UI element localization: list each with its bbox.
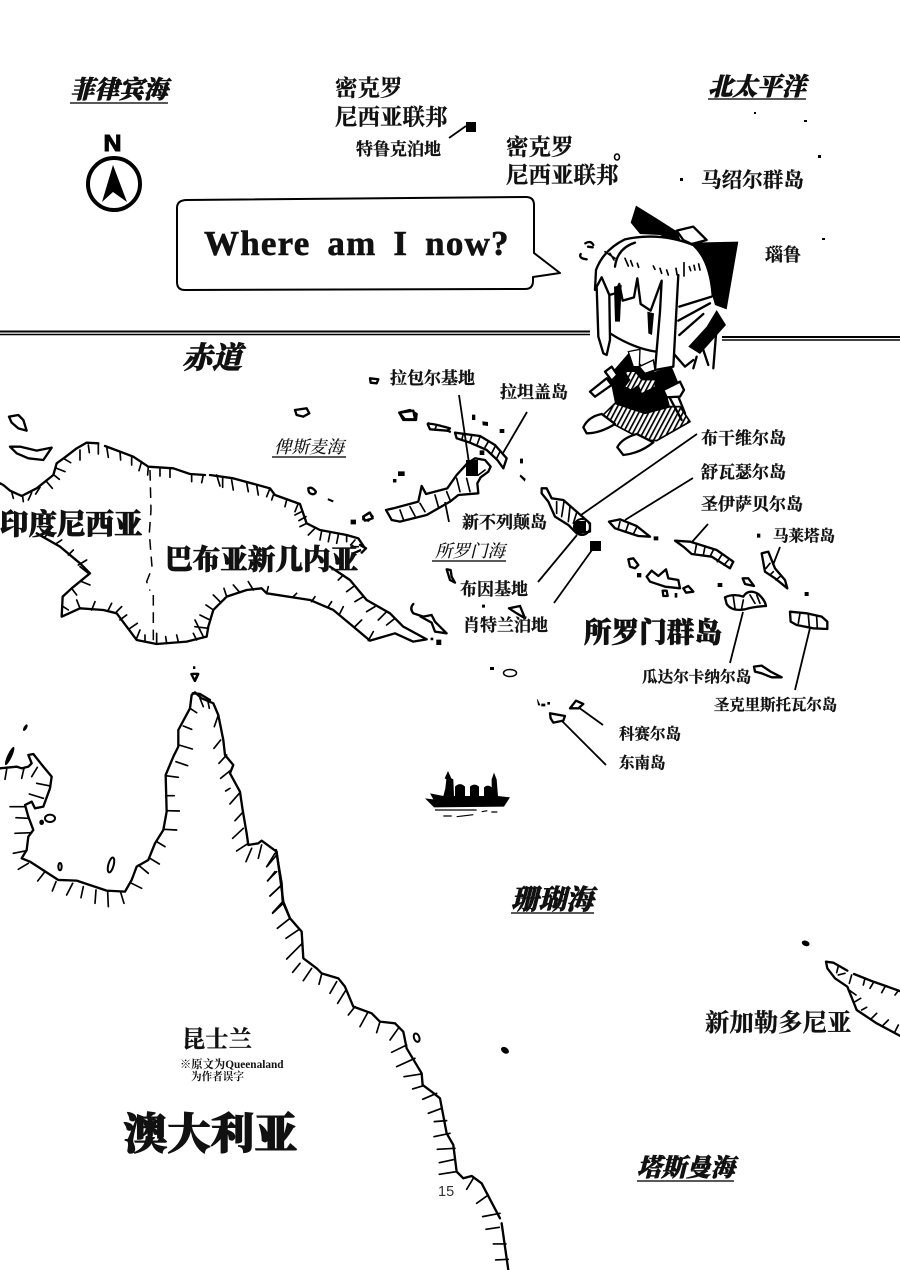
islets near Rabaul (360, 378, 525, 618)
equator line left (0, 332, 590, 334)
label: Micronesia south: 尼西亚联邦 (506, 163, 619, 188)
island: Choiseul (609, 519, 650, 537)
footnote: author typo: 为作者误字 (191, 1070, 244, 1083)
small black islets (193, 472, 441, 669)
island: Malaita (762, 552, 787, 588)
left cuff (605, 367, 617, 381)
water ripples (435, 810, 497, 817)
label: New Britain: 新不列颠岛 (462, 512, 547, 532)
label: Micronesia north (335, 76, 448, 130)
island: Santa Isabel (675, 541, 733, 568)
label: Micronesia south (506, 135, 619, 188)
sea label: Solomon Sea: 所罗门海 (435, 541, 507, 561)
speech text: Where am I now? (204, 224, 510, 263)
ticks: Bougainville (557, 502, 577, 523)
right sleeve (663, 382, 684, 397)
head outline (595, 237, 713, 295)
eyes (614, 285, 654, 335)
head fill (596, 237, 713, 353)
label: Truk anchorage: 特鲁克泊地 (356, 139, 441, 159)
map: New Caledonia (801, 939, 900, 1037)
ticks: New Britain (400, 470, 485, 519)
hair detail marks (605, 252, 700, 276)
label: Bougainville: 布干维尔岛 (701, 428, 786, 448)
speech bubble (177, 197, 560, 290)
island group: north-west islands (9, 408, 450, 700)
islets: Marshall and Nauru (490, 112, 825, 670)
label: Papua New Guinea: 巴布亚新几内亚 (165, 544, 358, 575)
islet (801, 939, 810, 947)
skirt (601, 403, 690, 441)
left arm (590, 378, 612, 397)
map: Queensland coast (268, 850, 510, 1270)
sea label: Philippine Sea: 菲律宾海 (70, 76, 172, 104)
label: Equator: 赤道 (182, 342, 247, 375)
label: Rabaul base: 拉包尔基地 (390, 368, 475, 388)
footnote: author typo (180, 1057, 284, 1083)
right arm (670, 397, 685, 420)
long side hair fill (655, 275, 678, 370)
left bow (631, 206, 683, 246)
label: Marshall Islands: 马绍尔群岛 (701, 168, 804, 192)
coast: New Guinea (0, 443, 427, 644)
label: Micronesia north: 密克罗 (335, 76, 403, 101)
map: Solomon Islands (609, 519, 827, 677)
label: Kossol island: 科赛尔岛 (619, 724, 681, 743)
fringe and long side hair (609, 275, 678, 370)
island: New Ireland (428, 424, 507, 468)
label: Buin base: 布因基地 (460, 580, 528, 599)
sea label: Coral Sea: 珊瑚海 (511, 884, 598, 915)
coast: Queensland (276, 850, 508, 1270)
coast ticks: Cape York (5, 698, 283, 913)
label: Indonesia: 印度尼西亚 (0, 508, 143, 541)
label: Guadalcanal: 瓜达尔卡纳尔岛 (642, 667, 751, 686)
label: South East island: 东南岛 (619, 753, 666, 772)
ticks: Solomon Islands (618, 522, 817, 628)
islets: Coral Sea coast (413, 1033, 510, 1055)
coast ticks: Queensland (268, 855, 508, 1260)
island: Bougainville (542, 488, 590, 533)
hair strands (615, 243, 712, 335)
sea label: North Pacific: 北太平洋 (708, 73, 809, 101)
icon: compass north arrow: N (104, 130, 122, 156)
ticks: New Ireland (435, 425, 500, 458)
left lock (597, 277, 610, 355)
ship hull and superstructure (425, 771, 510, 807)
label: Choiseul: 舒瓦瑟尔岛 (701, 462, 786, 482)
border: Indonesia and Papua New Guinea (147, 470, 153, 642)
base marker: Rabaul (466, 460, 478, 476)
label: Ratangai island: 拉坦盖岛 (500, 382, 568, 402)
label: Australia: 澳大利亚 (124, 1111, 298, 1159)
label: Micronesia south: 密克罗 (506, 135, 574, 160)
base marker: Truk anchorage (466, 122, 476, 132)
black islets (637, 534, 808, 597)
character: girl with bow (580, 206, 738, 455)
coast: New Caledonia (826, 962, 900, 1037)
sea label: Bismarck Sea: 俾斯麦海 (274, 437, 346, 457)
sweat marks (580, 242, 593, 259)
chin line (610, 333, 656, 352)
label: Shortland anchorage: 肖特兰泊地 (463, 615, 548, 635)
label: Micronesia north: 尼西亚联邦 (335, 105, 448, 130)
page number: 15 (438, 1184, 454, 1200)
vest (607, 353, 680, 414)
islets: Pacific rings (504, 154, 620, 676)
coast ticks: New Guinea (12, 444, 395, 644)
left foot (583, 414, 615, 433)
collar (628, 349, 655, 373)
ribbon loop (677, 227, 707, 244)
label: San Cristobal: 圣克里斯托瓦尔岛 (714, 695, 837, 714)
label: Queensland: 昆士兰 (182, 1026, 252, 1053)
island: New Britain (386, 458, 491, 522)
map: New Guinea (0, 408, 450, 700)
map: northern Australia coast (0, 666, 290, 918)
icon: ship (425, 771, 510, 817)
black islets (393, 415, 525, 607)
leader lines (445, 126, 810, 765)
label: Solomon Islands: 所罗门群岛 (584, 617, 722, 648)
right foot (617, 434, 653, 455)
label: Nauru: 瑙鲁 (765, 245, 801, 265)
coast ticks: New Caledonia (837, 966, 898, 1032)
base marker: Shortland (590, 541, 601, 551)
islets: Kossol and South East (537, 699, 583, 723)
equator line right (722, 337, 900, 340)
island: San Cristobal (790, 612, 827, 629)
sea label: Tasman Sea: 塔斯曼海 (637, 1154, 739, 1182)
label: Santa Isabel: 圣伊萨贝尔岛 (701, 494, 803, 514)
map: New Britain and New Ireland and Bougainville (360, 378, 590, 618)
base marker: Buin (574, 519, 590, 535)
icon: compass north arrow (88, 130, 140, 210)
label: Malaita: 马莱塔岛 (773, 526, 835, 545)
bow tie (625, 372, 655, 393)
coast: Arnhem and Gulf of Carpentaria (0, 692, 290, 918)
island: Guadalcanal (725, 578, 766, 610)
island: Russell and Florida group (628, 558, 782, 677)
label: New Caledonia: 新加勒多尼亚 (705, 1010, 851, 1037)
right bow (688, 242, 738, 354)
islets: Torres and Gulf (3, 666, 198, 873)
footnote: author typo: ※原文为Queenaland (180, 1057, 284, 1071)
back hair strands (673, 327, 717, 368)
